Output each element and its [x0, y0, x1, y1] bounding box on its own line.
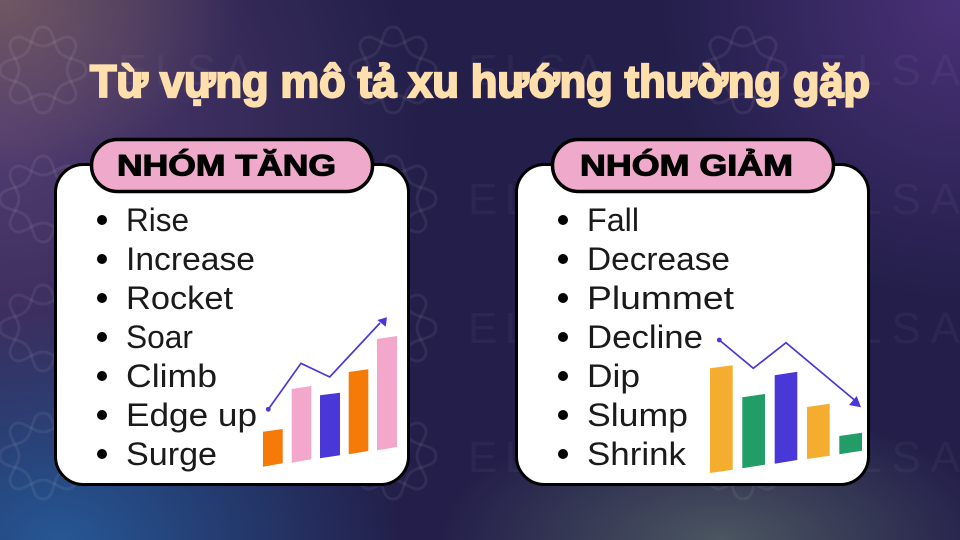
background watermark pattern: ELSA [468, 304, 604, 353]
background watermark pattern: ELSA [118, 175, 254, 224]
card: nhóm tăng [56, 164, 408, 484]
background watermark pattern: ELSA [118, 46, 254, 95]
chart: rising bars with arrow [263, 317, 397, 467]
heading pill: nhóm tăng [92, 140, 372, 192]
word list: nhóm giảm: Decline [587, 319, 703, 355]
word list: nhóm giảm [558, 202, 734, 472]
background watermark pattern: ELSA [818, 304, 960, 353]
card: nhóm giảm [516, 164, 868, 484]
background watermark pattern: ELSA [818, 46, 960, 95]
heading pill: nhóm tăng: NHÓM TĂNG [117, 148, 336, 182]
panel: nhóm tăng [56, 140, 408, 484]
background watermark pattern: ELSA [118, 433, 254, 482]
word list: nhóm tăng: Rocket [126, 280, 233, 316]
word list: nhóm tăng: Increase [126, 241, 255, 277]
heading pill: nhóm giảm: NHÓM GIẢM [580, 148, 793, 182]
word list: nhóm tăng: Climb [126, 358, 217, 394]
word list: nhóm giảm: Shrink [587, 436, 687, 472]
word list: nhóm giảm: Fall [587, 202, 639, 238]
word list: nhóm giảm: Plummet [587, 280, 734, 316]
word list: nhóm tăng: Edge up [126, 397, 257, 433]
chart: falling bars with arrow [710, 338, 862, 473]
background watermark pattern: ELSA [468, 46, 604, 95]
word list: nhóm giảm: Slump [587, 397, 688, 433]
background watermark pattern: ELSA [818, 433, 960, 482]
background watermark pattern: ELSA [118, 304, 254, 353]
word list: nhóm giảm: Dip [587, 358, 640, 394]
title: Từ vựng mô tả xu hướng thường gặp [90, 56, 870, 107]
heading pill: nhóm giảm [552, 140, 834, 192]
word list: nhóm tăng [97, 202, 257, 472]
word list: nhóm tăng: Rise [126, 202, 189, 238]
word list: nhóm tăng: Soar [126, 319, 193, 355]
panel: nhóm giảm [516, 140, 868, 484]
background watermark pattern: ELSA [468, 433, 604, 482]
background watermark pattern: ELSA [818, 175, 960, 224]
background watermark pattern: ELSA [468, 175, 604, 224]
word list: nhóm giảm: Decrease [587, 241, 730, 277]
word list: nhóm tăng: Surge [126, 436, 217, 472]
